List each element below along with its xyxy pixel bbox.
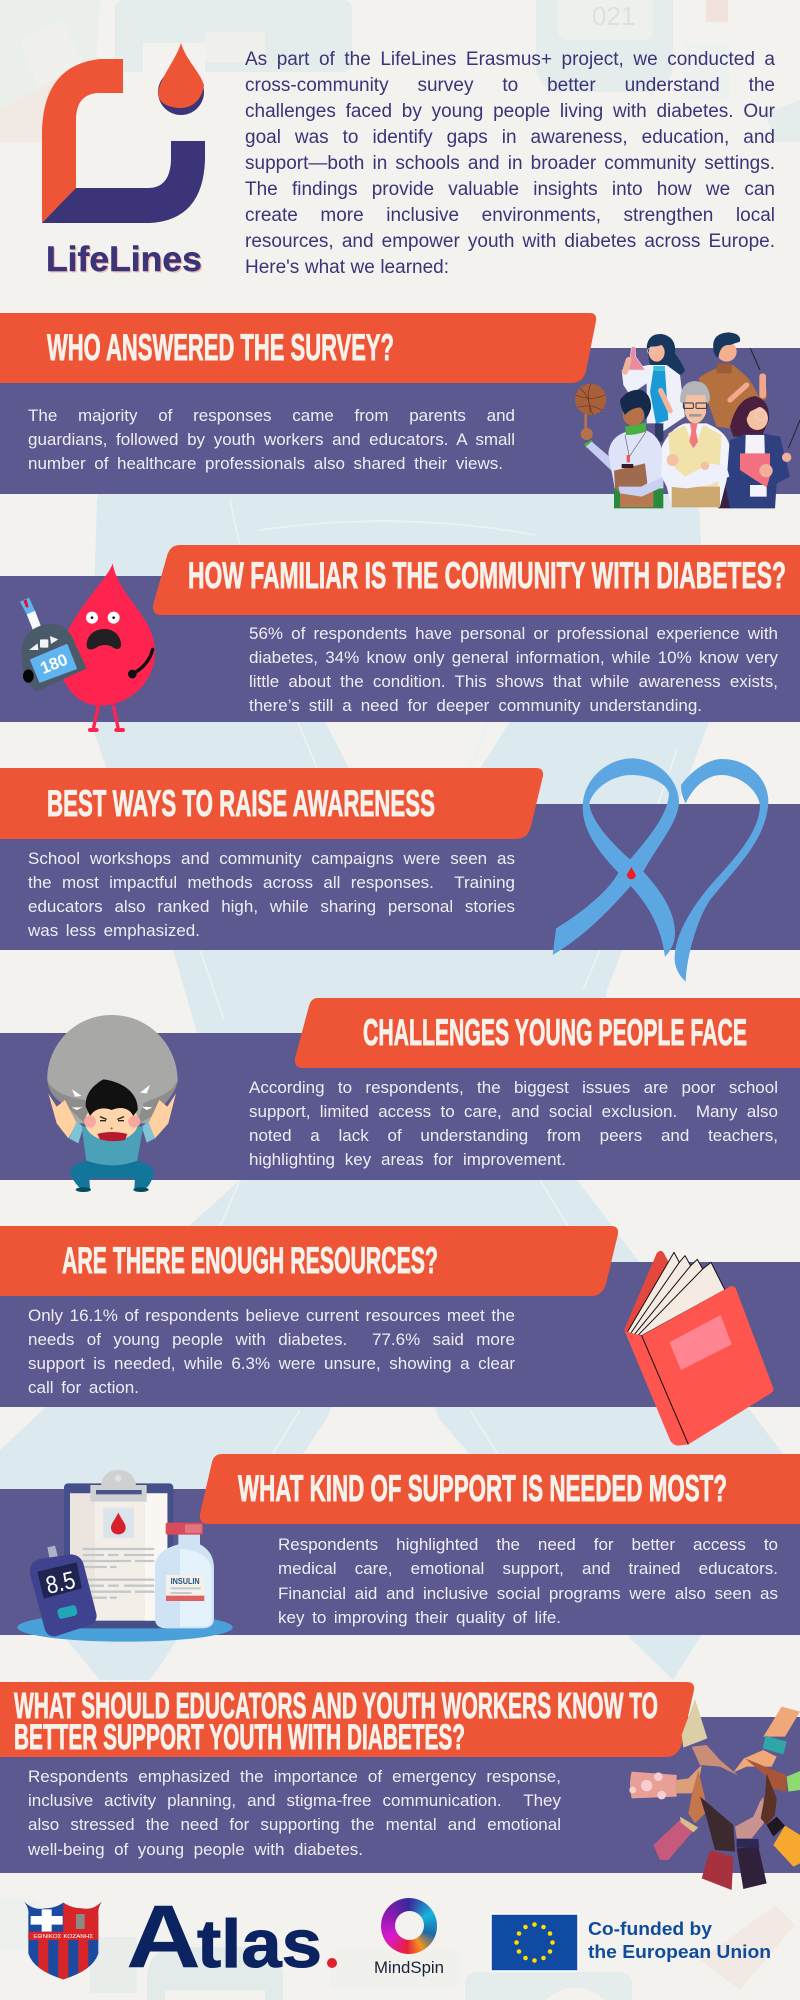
illustration: boy lifting boulder: [47, 1015, 178, 1192]
illustration: group of people: [575, 332, 800, 508]
text: support: Respondents highlighted the need for better access to: [278, 1535, 778, 1554]
text: how familiar: 56% of respondents have personal or professional experience with: [249, 624, 778, 643]
heading: who answered: [0, 313, 596, 383]
panel: challenges young people face: [0, 998, 800, 1192]
intro paragraph: resources, and empower youth with diabetes across Europe.: [245, 231, 775, 252]
text: resources: support is needed, while 6.3% were unsure, showing a clear: [28, 1354, 515, 1373]
text: who answered: The majority of responses came from parents and: [28, 406, 515, 425]
logo: Ethnikos Kozanis shield: [24, 1902, 102, 1980]
logo: EU flag and co-funded text: Co-funded by: [588, 1919, 712, 1939]
band: [0, 1262, 800, 1407]
older teacher: [662, 381, 729, 507]
text: how familiar: [249, 624, 778, 715]
intro paragraph: goal was to identify gaps in awareness, education, and: [245, 127, 775, 148]
text: support: key to improving their quality of life.: [278, 1608, 561, 1627]
text: resources: needs of young people with diabetes. 77.6% said more: [28, 1330, 515, 1349]
illustration: hands forming a heart: [629, 1699, 800, 1890]
logo mark: [42, 43, 205, 223]
heading: who answered: WHO ANSWERED THE SURVEY?: [47, 327, 394, 368]
text: challenges: support, limited access to care, and social exclusion. Many also: [249, 1102, 778, 1121]
text: educators: inclusive activity planning, and stigma-free communication. They: [28, 1791, 561, 1810]
heading: challenges: [294, 998, 800, 1068]
text: challenges: highlighting key areas for improvement.: [249, 1150, 566, 1169]
logo: EU flag and co-funded text: the European Union: [588, 1942, 771, 1962]
text: educators: well-being of young people with diabetes.: [28, 1840, 363, 1859]
panel: how familiar: [0, 545, 800, 732]
text: who answered: [28, 406, 515, 473]
lab coat woman: [622, 334, 685, 442]
young man with basketball: [575, 384, 663, 508]
heading: educators: BETTER SUPPORT YOUTH WITH DIABETES?: [14, 1718, 465, 1757]
heading: educators: [0, 1682, 694, 1757]
text: best ways: [28, 849, 515, 940]
heading: resources: ARE THERE ENOUGH RESOURCES?: [62, 1240, 438, 1281]
text: how familiar: little about the condition. This shows that while awareness exists,: [249, 672, 778, 691]
text: educators: also stressed the need for supporting the mental and emotional: [28, 1815, 561, 1834]
logo: LifeLines: [42, 43, 205, 279]
illustration: clipboard, glucose meter and insulin: INSULIN: [171, 1577, 200, 1586]
panel: what kind of support: [0, 1454, 800, 1642]
text: support: [278, 1535, 778, 1627]
heading: best ways: [0, 768, 544, 839]
illustration: blue awareness ribbon with drop: [552, 758, 768, 982]
band: [0, 1033, 800, 1180]
text: challenges: According to respondents, the biggest issues are poor school: [249, 1078, 778, 1097]
intro paragraph: As part of the LifeLines Erasmus+ project, we conducted a: [245, 49, 775, 70]
text: resources: [28, 1306, 515, 1397]
heading: how familiar: [152, 545, 800, 615]
EU flag: [491, 1914, 578, 1971]
brown sweater man: [698, 332, 767, 430]
intro paragraph: support—both in schools and in broader community settings.: [245, 153, 775, 174]
text: resources: Only 16.1% of respondents believe current resources meet the: [28, 1306, 515, 1325]
text: how familiar: diabetes, 34% know only general information, while 10% know very: [249, 648, 778, 667]
panel: best ways to raise awareness: [0, 758, 800, 982]
MindSpin ring: [381, 1898, 437, 1954]
band: [0, 576, 800, 722]
logo: MindSpin: [374, 1898, 444, 1977]
background watermark: diabetes ribbon and meters: 021: [592, 1, 635, 31]
panel: are there enough resources: [0, 1226, 800, 1446]
intro paragraph: create more inclusive environments, strengthen local: [245, 205, 775, 226]
logo: EU flag and co-funded text: [490, 1913, 771, 1972]
band: [0, 1717, 800, 1873]
logo: Atlas: [126, 1900, 337, 1972]
heading: support: [200, 1454, 800, 1524]
intro paragraph: cross-community survey to better understand the: [245, 75, 775, 96]
band: [0, 1489, 800, 1635]
text: resources: call for action.: [28, 1378, 139, 1397]
band: [0, 804, 800, 950]
logo wordmark: LifeLines: [46, 239, 202, 279]
text: how familiar: there’s still a need for deeper community understanding.: [249, 696, 702, 715]
text: who answered: number of healthcare professionals also shared their views.: [28, 454, 503, 473]
text: challenges: [249, 1078, 778, 1169]
text: educators: Respondents emphasized the importance of emergency response,: [28, 1767, 561, 1786]
panel: what should educators know: [0, 1682, 800, 1890]
text: best ways: School workshops and community campaigns were seen as: [28, 849, 515, 868]
illustration: clipboard, glucose meter and insulin: [17, 1470, 233, 1642]
text: who answered: guardians, followed by youth workers and educators. A small: [28, 430, 515, 449]
logo: Ethnikos Kozanis shield: ΕΘΝΙΚΟΣ ΚΟΖΑΝΗΣ: [33, 1934, 94, 1940]
intro paragraph: challenges faced by young people living with diabetes. Our: [245, 101, 775, 122]
panel: who answered the survey: [0, 313, 800, 508]
text: best ways: the most impactful methods across all responses. Training: [28, 873, 515, 892]
MindSpin wordmark: MindSpin: [374, 1958, 444, 1977]
text: best ways: educators also ranked high, while sharing personal stories: [28, 897, 515, 916]
illustration: scared blood drop with glucose meter: 180: [37, 650, 70, 678]
intro paragraph: [245, 49, 775, 278]
band: [0, 348, 800, 494]
heading: resources: [0, 1226, 618, 1296]
text: challenges: noted a lack of understanding from peers and teachers,: [249, 1126, 778, 1145]
intro paragraph: The findings provide valuable insights into how we can: [245, 179, 775, 200]
heading: best ways: BEST WAYS TO RAISE AWARENESS: [47, 783, 435, 824]
illustration: clipboard, glucose meter and insulin: 8.5: [43, 1567, 78, 1600]
text: educators: [28, 1767, 561, 1859]
text: best ways: was less emphasized.: [28, 921, 200, 940]
woman with folder: [718, 396, 800, 508]
text: support: medical care, emotional support, and trained educators.: [278, 1559, 778, 1578]
text: support: Financial aid and inclusive social programs were also seen as: [278, 1584, 778, 1603]
illustration: scared blood drop with glucose meter: [20, 564, 155, 732]
illustration: red book: [624, 1250, 774, 1446]
intro paragraph: Here's what we learned:: [245, 257, 449, 278]
